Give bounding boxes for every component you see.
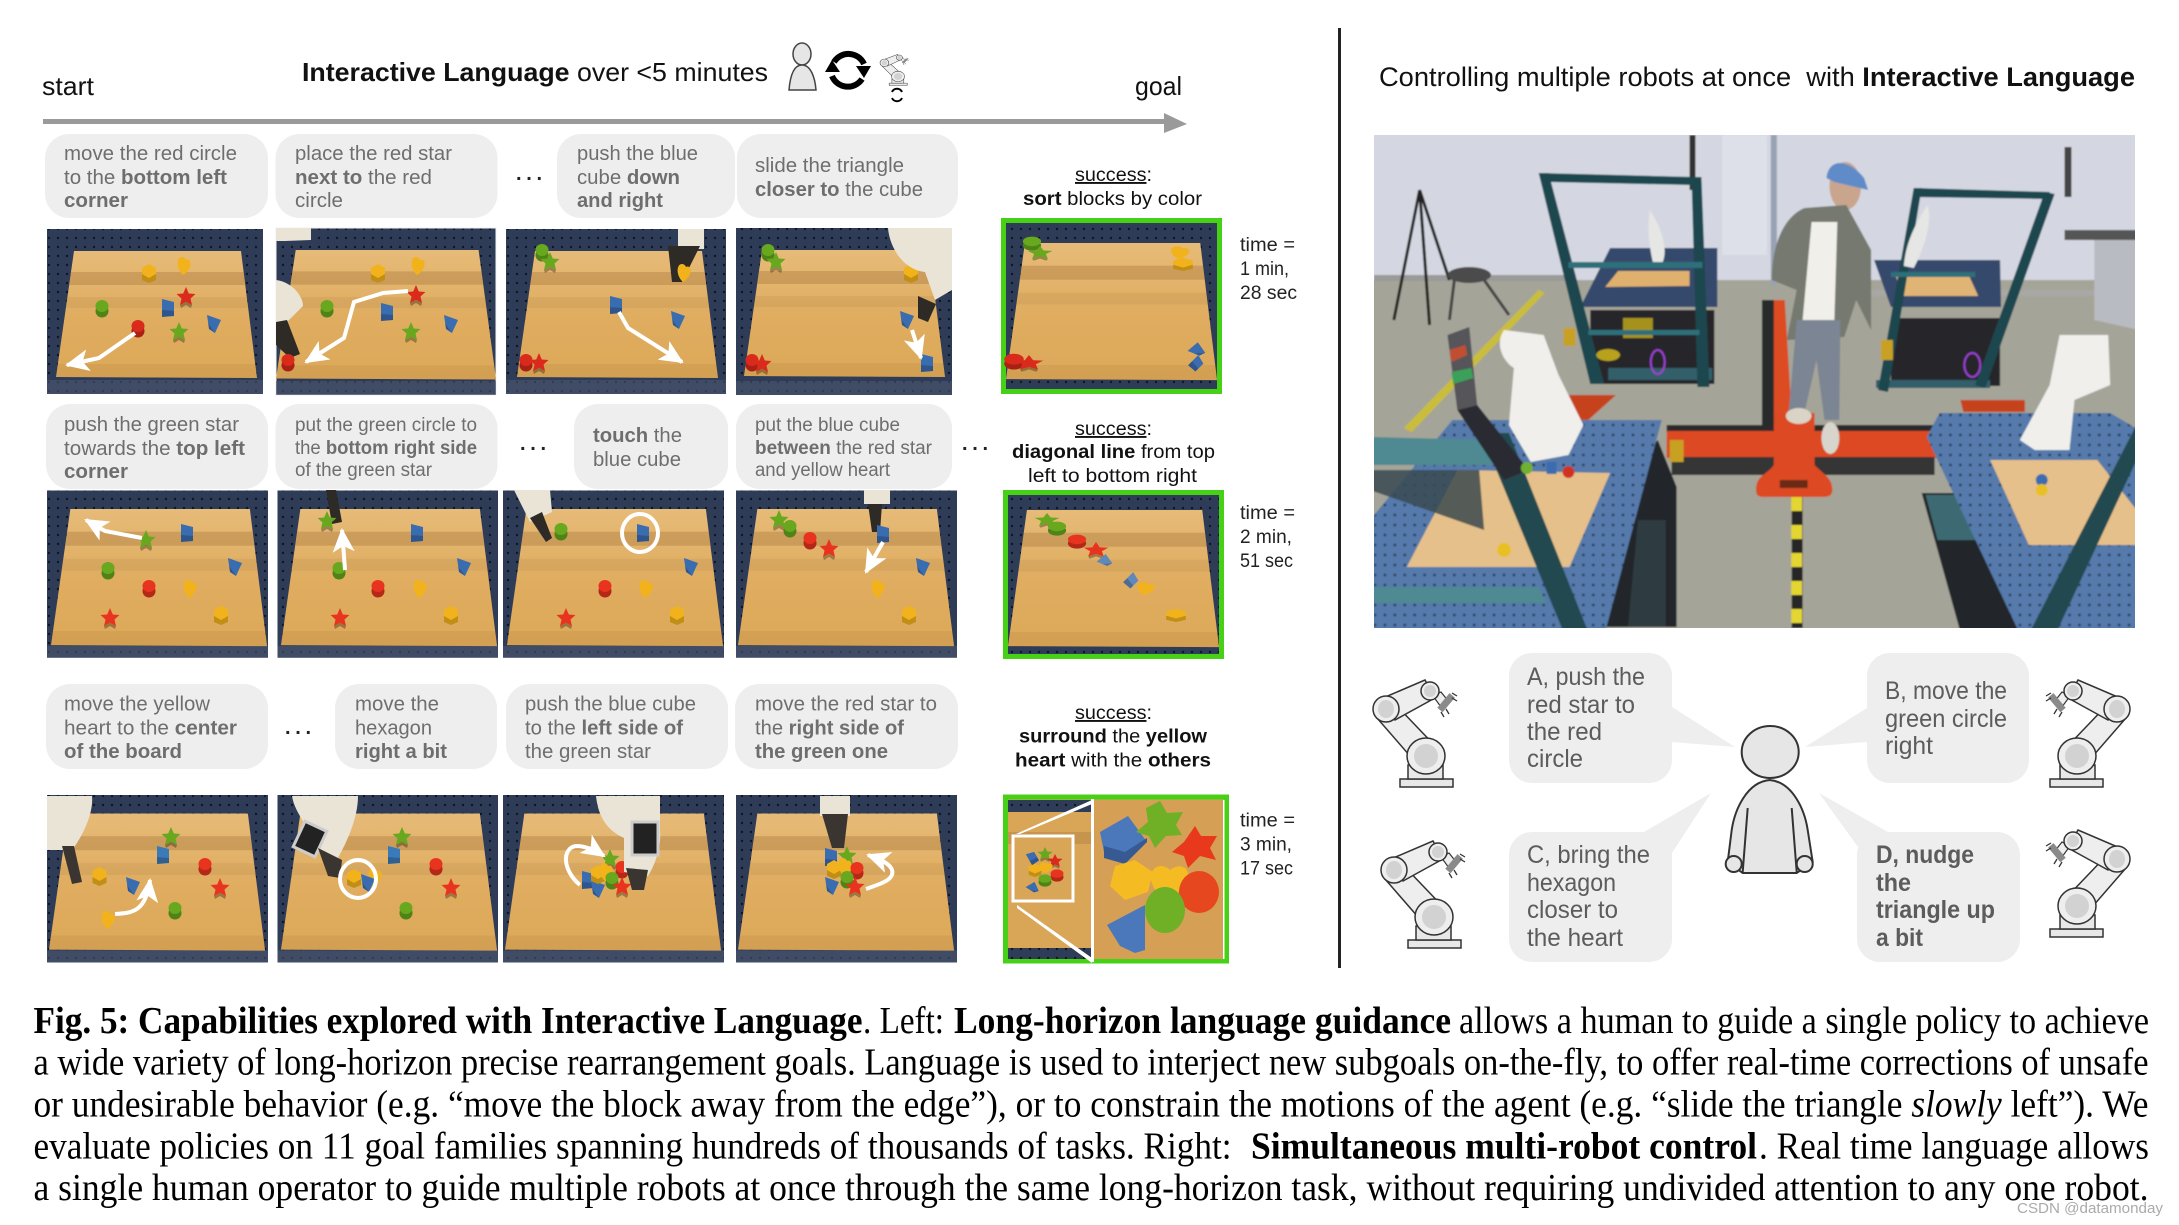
row 3 time	[1240, 810, 1295, 880]
row 3 instruction bubbles	[46, 684, 958, 769]
row 1 photo 1	[47, 229, 263, 394]
caption: . Left:	[863, 1000, 944, 1042]
row 2 time	[1240, 503, 1295, 572]
row 3 instruction bubbles: right a bit	[355, 741, 447, 763]
speech bubble B: right	[1885, 732, 1933, 760]
row 2 instruction bubbles: of the green star	[295, 460, 433, 481]
arrow: timeline	[43, 113, 1187, 133]
icon: robot D	[2046, 830, 2130, 937]
row 2 instruction bubbles: blue cube	[593, 449, 681, 471]
icon: robot C	[1381, 841, 1465, 948]
row 2 instruction bubbles: ...	[520, 433, 546, 455]
row 3 photo 3	[503, 795, 724, 962]
row 1 success image	[1004, 220, 1220, 392]
row 1 time: time =	[1240, 235, 1295, 256]
photo: human operator among four robot stations	[1370, 130, 2144, 632]
speech bubble D: D, nudge	[1876, 841, 1974, 869]
heading: controlling multiple robots: Controlling multiple robots at once with Interactive Language	[1379, 62, 2135, 92]
speech bubble C: the heart	[1527, 924, 1623, 952]
row 2 success text	[1012, 419, 1215, 487]
row 2 time: 51 sec	[1240, 551, 1293, 572]
icon: human operator	[1726, 726, 1813, 873]
row 2 instruction bubbles: push the green star	[64, 414, 239, 436]
row 3 instruction bubbles: of the board	[64, 741, 182, 763]
speech bubble A	[1509, 653, 1735, 783]
row 1 instruction bubbles: corner	[64, 190, 128, 212]
row 2 photo 3	[503, 490, 724, 658]
row 2 time: 2 min,	[1240, 527, 1292, 548]
speech bubble C: hexagon	[1527, 869, 1616, 897]
panel: long-horizon language guidance	[42, 43, 1297, 963]
speech bubble D	[1819, 793, 2020, 962]
row 2 photo 2	[278, 490, 498, 658]
caption: evaluate policies on 11 goal families spanning hundreds of thousands of tasks. Right:	[34, 1126, 1232, 1168]
row 1 time: 1 min,	[1240, 259, 1289, 280]
row 2 time: time =	[1240, 503, 1295, 524]
row 3 success text: success:	[1075, 703, 1152, 724]
row 2 instruction bubbles: towards the top left	[64, 438, 245, 460]
row 3 instruction bubbles: move the yellow	[64, 694, 211, 716]
row 3 photo 1	[47, 795, 268, 962]
icon: robot A	[1373, 680, 1457, 787]
row 2 success image	[1006, 492, 1222, 656]
caption: . Real time language allows	[1759, 1126, 2149, 1168]
row 1 instruction bubbles: and right	[577, 190, 663, 212]
speech bubble A: A, push the	[1527, 663, 1645, 691]
speech bubble B	[1805, 653, 2029, 783]
row 2 instruction bubbles: the bottom right side	[295, 438, 477, 459]
row 1 instruction bubbles: to the bottom left	[64, 167, 227, 189]
row 1 instruction bubbles: push the blue	[577, 143, 698, 165]
row 1 photo 4	[736, 228, 952, 395]
row 1 success text: sort blocks by color	[1023, 189, 1203, 210]
row 2 success text: left to bottom right	[1028, 466, 1198, 487]
watermark: CSDN @datamonday	[2017, 1200, 2163, 1217]
row 1 photo 3	[506, 229, 726, 394]
row 2 instruction bubbles: corner	[64, 461, 128, 483]
speech bubble D: the	[1876, 869, 1911, 897]
row 3 photo 4	[736, 795, 957, 962]
row 3 instruction bubbles: to the left side of	[525, 718, 683, 740]
row 1 instruction bubbles: ...	[516, 163, 542, 185]
caption: Long-horizon language guidance	[954, 1000, 1451, 1042]
icon: human and robot feedback loop	[789, 43, 909, 101]
row 3 instruction bubbles: hexagon	[355, 718, 432, 740]
row 2 success text: diagonal line from top	[1012, 442, 1215, 463]
row 1 success text: success:	[1075, 165, 1152, 186]
icon: robot B	[2046, 680, 2130, 787]
speech bubble C: C, bring the	[1527, 841, 1650, 869]
speech bubble D: a bit	[1876, 924, 1924, 952]
row 3 success text: surround the yellow	[1019, 726, 1207, 748]
row 3 instruction bubbles: move the red star to	[755, 694, 937, 716]
row 3 success text: heart with the others	[1015, 750, 1211, 772]
row 2 success text: success:	[1075, 419, 1152, 440]
row 3 instruction bubbles: the green one	[755, 741, 888, 763]
panel: multi-robot control	[1370, 62, 2144, 962]
row 2 instruction bubbles: ...	[962, 433, 988, 455]
row 1 time	[1240, 235, 1297, 304]
row 3 success text	[1015, 703, 1211, 772]
row 3 time: 17 sec	[1240, 858, 1293, 880]
row 3 instruction bubbles: the right side of	[755, 718, 904, 740]
row 3 time: time =	[1240, 810, 1295, 832]
row 3 time: 3 min,	[1240, 834, 1292, 856]
row 1 instruction bubbles: move the red circle	[64, 143, 237, 165]
speech bubble D: triangle up	[1876, 896, 1995, 924]
row 2 photo 1	[47, 490, 268, 658]
row 3 instruction bubbles: the green star	[525, 741, 651, 763]
row 1 success text	[1023, 165, 1203, 210]
row 2 instruction bubbles	[46, 404, 988, 489]
heading: interactive language over 5 minutes: Interactive Language over <5 minutes	[302, 57, 768, 87]
row 1 instruction bubbles	[45, 134, 958, 218]
row 2 instruction bubbles: put the green circle to	[295, 415, 477, 436]
speech bubble B: B, move the	[1885, 677, 2007, 705]
row 2 instruction bubbles: and yellow heart	[755, 460, 891, 481]
row 2 instruction bubbles: touch the	[593, 425, 682, 447]
row 1 instruction bubbles: closer to the cube	[755, 179, 923, 201]
row 2 instruction bubbles: put the blue cube	[755, 415, 900, 436]
row 1 instruction bubbles: cube down	[577, 167, 680, 189]
label: goal: goal	[1135, 71, 1182, 101]
row 3 instruction bubbles: move the	[355, 694, 439, 716]
row 3 instruction bubbles: heart to the center	[64, 718, 237, 740]
row 3 instruction bubbles: ...	[285, 717, 311, 739]
row 2 photo 4	[736, 490, 957, 658]
row 3 instruction bubbles: push the blue cube	[525, 694, 696, 716]
row 1 instruction bubbles: circle	[295, 190, 343, 212]
row 3 success image with zoom inset	[1006, 797, 1226, 963]
speech bubble C	[1509, 793, 1711, 962]
speech bubble A: circle	[1527, 745, 1583, 773]
speech bubble B: green circle	[1885, 705, 2007, 733]
row 1 instruction bubbles: slide the triangle	[755, 155, 904, 177]
caption	[34, 1000, 2149, 1209]
speech bubble C: closer to	[1527, 896, 1618, 924]
row 1 instruction bubbles: next to the red	[295, 167, 432, 189]
speech bubble A: the red	[1527, 718, 1602, 746]
row 1 photo 2	[276, 228, 496, 395]
label: start: start	[42, 71, 95, 101]
speech bubble A: red star to	[1527, 691, 1635, 719]
row 1 instruction bubbles: place the red star	[295, 143, 452, 165]
row 1 time: 28 sec	[1240, 283, 1297, 304]
caption: Simultaneous multi-robot control	[1251, 1126, 1757, 1168]
row 3 photo 2	[278, 795, 498, 962]
row 2 instruction bubbles: between the red star	[755, 438, 933, 459]
caption: Fig. 5: Capabilities explored with Interactive Language	[34, 1000, 862, 1042]
caption: or undesirable behavior (e.g. “move the block away from the edge”), or to constrain the motions of the agent (e.g. “slide the triangle slowly left”). We	[34, 1084, 2148, 1126]
